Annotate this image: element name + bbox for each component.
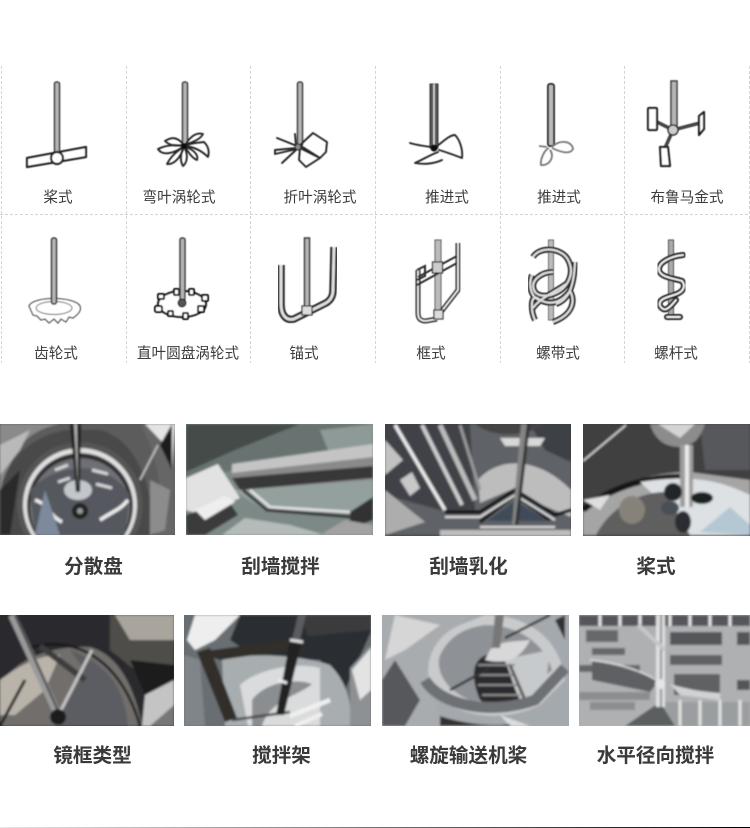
photo: disperser disc (0, 424, 175, 535)
label: paddle: 桨式 (43, 189, 73, 206)
label: propeller B: 推进式 (537, 189, 581, 206)
icon: pitched-blade turbine (275, 82, 327, 167)
label: screw: 螺杆式 (654, 345, 698, 362)
photo: horizontal radial mixer (579, 615, 750, 726)
photo: mirror frame (0, 615, 174, 726)
label: propeller A: 推进式 (425, 189, 469, 206)
icon: anchor (281, 238, 334, 319)
label: ribbon: 螺带式 (536, 345, 580, 362)
icon: frame (417, 240, 458, 321)
icon: toothed disc (29, 238, 80, 323)
icon: screw (659, 240, 684, 318)
icon: straight-blade disc turbine (155, 238, 208, 319)
icon: paddle impeller (27, 82, 86, 167)
label: pitched-blade turbine: 折叶涡轮式 (284, 189, 357, 206)
label: Brumagin: 布鲁马金式 (651, 189, 724, 206)
icon: ribbon (530, 240, 575, 322)
photo: agitator frame (184, 615, 371, 726)
label: toothed disc: 齿轮式 (34, 345, 78, 362)
label: frame: 框式 (416, 345, 446, 362)
icon: propeller B (539, 84, 573, 165)
photo: paddle (583, 424, 750, 536)
label: curved-blade turbine: 弯叶涡轮式 (143, 189, 216, 206)
caption: 分散盘: 分散盘 (64, 555, 123, 578)
icon: curved-blade turbine (158, 82, 209, 166)
caption: 刮墙乳化: 刮墙乳化 (429, 556, 508, 578)
caption: 刮墙搅拌: 刮墙搅拌 (241, 555, 320, 578)
photo: wall scraper emulsifier (385, 424, 571, 536)
caption: 水平径向搅拌: 水平径向搅拌 (597, 744, 714, 767)
label: anchor: 锚式 (289, 345, 319, 362)
photo: wall scraper (186, 424, 373, 535)
label: straight-blade disc turbine: 直叶圆盘涡轮式 (137, 344, 239, 362)
icon: Brumagin impeller (648, 81, 704, 166)
caption: 搅拌架: 搅拌架 (252, 744, 311, 767)
icon: propeller A (410, 84, 462, 164)
caption: 桨式: 桨式 (636, 556, 676, 578)
caption: 螺旋输送机桨: 螺旋输送机桨 (410, 744, 528, 767)
photo: screw conveyor paddle (382, 615, 569, 726)
caption: 镜框类型: 镜框类型 (53, 744, 132, 767)
